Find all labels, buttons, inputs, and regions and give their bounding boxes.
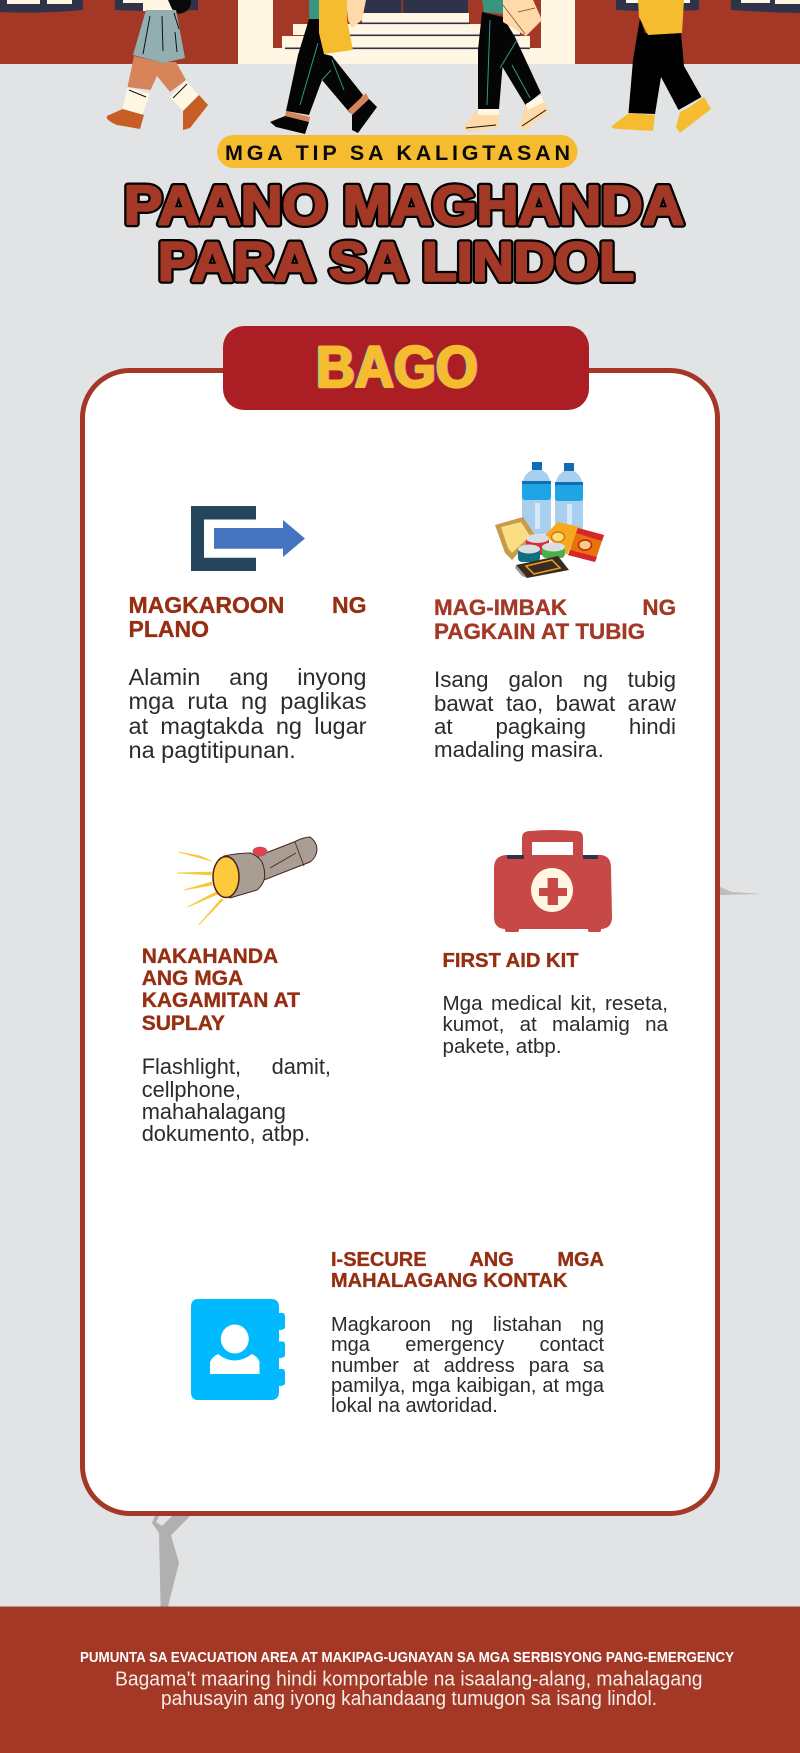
heading: plan: MAGKAROON NG	[128, 592, 366, 618]
icon: contact book	[191, 1299, 285, 1400]
pill: safety tips label: MGA TIP SA KALIGTASAN	[225, 141, 570, 165]
walker: yellow scarf	[270, 0, 377, 134]
text: first aid: kumot, at malamig na	[442, 1013, 668, 1036]
section tab: BAGO: BAGO	[316, 335, 478, 400]
title: PAANO MAGHANDA	[124, 174, 684, 236]
heading: plan	[128, 592, 366, 642]
icon: water and food supplies	[495, 462, 604, 578]
building facade	[0, 0, 800, 64]
pill: safety tips label	[217, 135, 578, 168]
title: PARA SA LINDOL	[158, 230, 634, 292]
footer band: Bagama't maaring hindi komportable na isaalang-alang, mahalagang	[115, 1668, 702, 1690]
heading: supplies: KAGAMITAN AT	[142, 989, 300, 1012]
section tab: BAGO	[223, 326, 589, 410]
title: PAANO MAGHANDA	[124, 174, 684, 236]
wall crack right	[720, 887, 762, 895]
heading: contacts: I-SECURE ANG MGA	[331, 1249, 604, 1271]
text: plan: at magtakda ng lugar	[128, 712, 366, 738]
wall crack lower left	[152, 1515, 191, 1606]
text: contacts	[331, 1314, 604, 1417]
text: food and water: madaling masira.	[434, 737, 604, 762]
walker: skirt	[107, 0, 208, 130]
heading: food and water: MAG-IMBAK NG	[434, 595, 676, 620]
panel: before-earthquake checklist card	[80, 368, 720, 1516]
text: contacts: lokal na awtoridad.	[331, 1395, 498, 1417]
icon: flashlight	[177, 837, 317, 925]
text: supplies: mahahalagang	[142, 1099, 286, 1124]
heading: food and water: PAGKAIN AT TUBIG	[434, 619, 645, 644]
text: contacts: Magkaroon ng listahan ng	[331, 1314, 604, 1336]
title: PARA SA LINDOL	[158, 230, 634, 292]
text: plan	[128, 664, 366, 763]
icon: exit plan arrow	[191, 506, 305, 571]
walker: yellow shirt	[612, 0, 711, 133]
footer band: PUMUNTA SA EVACUATION AREA AT MAKIPAG-UGNAYAN SA MGA SERBISYONG PANG-EMERGENCY	[80, 1649, 734, 1666]
text: supplies: dokumento, atbp.	[142, 1121, 310, 1146]
text: supplies	[142, 1054, 331, 1146]
text: plan: mga ruta ng paglikas	[128, 688, 366, 714]
footer band	[0, 1606, 800, 1753]
text: first aid: pakete, atbp.	[442, 1035, 562, 1058]
heading: contacts	[331, 1249, 604, 1292]
text: contacts: mga emergency contact	[331, 1334, 604, 1356]
text: supplies: Flashlight, damit,	[142, 1054, 331, 1079]
text: plan: Alamin ang inyong	[128, 664, 366, 690]
text: supplies: cellphone,	[142, 1076, 241, 1102]
text: first aid: Mga medical kit, reseta,	[442, 992, 668, 1015]
heading: plan: PLANO	[128, 616, 209, 642]
heading: supplies	[142, 944, 300, 1035]
icon: first aid kit	[494, 830, 612, 932]
footer band: pahusayin ang iyong kahandaang tumugon sa isang lindol.	[161, 1688, 657, 1710]
text: food and water: bawat tao, bawat araw	[434, 691, 676, 716]
text: plan: na pagtitipunan.	[128, 737, 296, 763]
walker: shoulder bag	[463, 0, 548, 132]
text: food and water: at pagkaing hindi	[434, 714, 676, 739]
text: contacts: number at address para sa	[331, 1355, 604, 1377]
heading: food and water	[434, 595, 676, 644]
heading: supplies: SUPLAY	[142, 1012, 225, 1035]
text: food and water: Isang galon ng tubig	[434, 667, 676, 692]
text: first aid	[442, 992, 668, 1058]
heading: first aid: FIRST AID KIT	[442, 950, 579, 972]
text: contacts: pamilya, mga kaibigan, at mga	[331, 1375, 604, 1397]
text: food and water	[434, 667, 676, 762]
title	[124, 174, 684, 292]
heading: supplies: ANG MGA	[142, 967, 243, 990]
heading: contacts: MAHALAGANG KONTAK	[331, 1270, 567, 1292]
heading: supplies: NAKAHANDA	[142, 944, 278, 968]
